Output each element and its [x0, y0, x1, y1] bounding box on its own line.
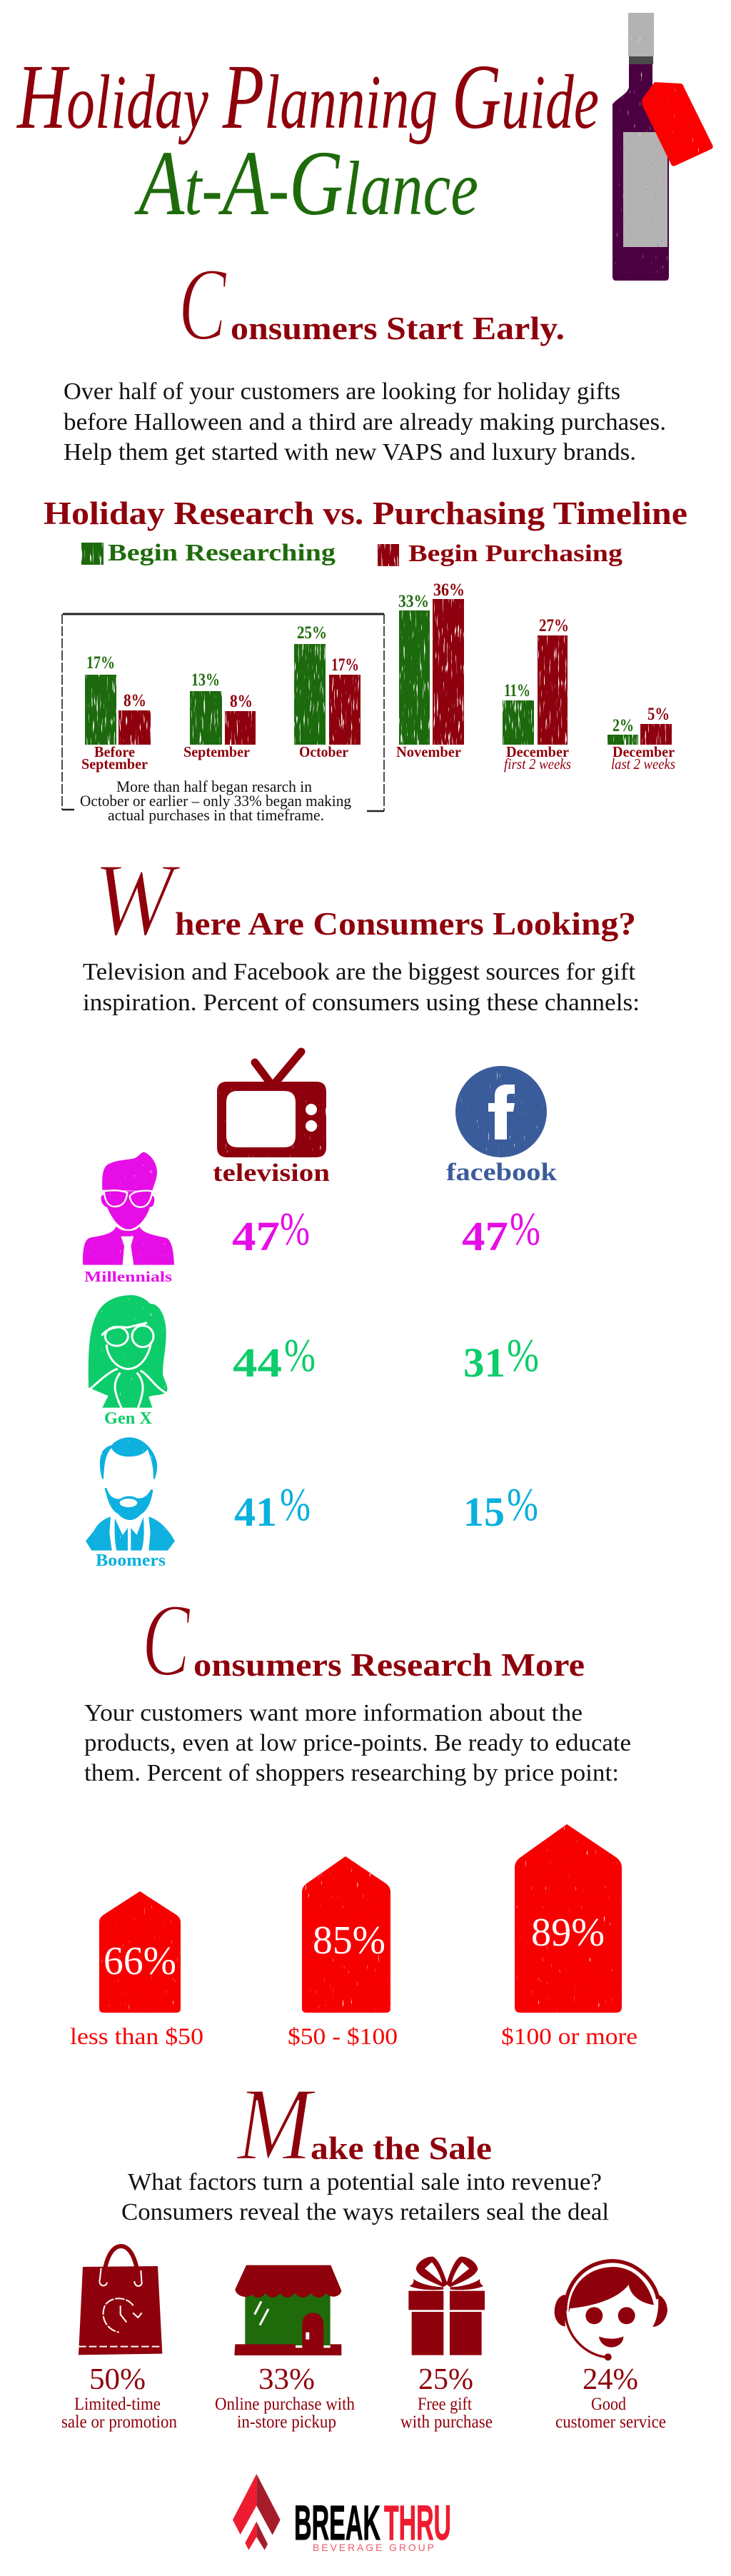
axis labels: first 2 weeks: [504, 755, 571, 773]
axis labels: November: [396, 743, 461, 760]
infographic canvas: THRU: [384, 2495, 451, 2550]
stat: facebook millennials: [462, 1203, 540, 1259]
text block: channels: Television and Facebook are the biggest sources for gift: [83, 959, 636, 985]
heading: consumers research more: [142, 1582, 585, 1698]
text block: sale factors: [121, 2169, 609, 2225]
stat: free gift: Free gift: [418, 2395, 472, 2414]
stat: online purchase: 33%: [258, 2363, 315, 2396]
stat: facebook millennials: 47: [462, 1213, 508, 1259]
stat: customer service: customer service: [555, 2413, 666, 2432]
callout text: [80, 778, 351, 824]
callout text: October or earlier – only 33% began making: [80, 792, 351, 810]
stat: television millennials: %: [280, 1203, 310, 1255]
bar value labels: 8%: [123, 691, 146, 710]
heading: where are consumers looking: here Are Consumers Looking?: [175, 906, 636, 942]
heading: consumers start early: [178, 246, 565, 362]
stat: limited-time sale: 50%: [89, 2363, 146, 2396]
text block: research: [84, 1700, 631, 1786]
text block: research: products, even at low price-points. Be ready to educate: [84, 1730, 631, 1756]
text block: channels: inspiration. Percent of consumers using these channels:: [83, 990, 640, 1016]
axis labels: last 2 weeks: [611, 755, 675, 773]
stat: facebook gen x: %: [507, 1329, 539, 1382]
axis labels: December: [506, 743, 569, 760]
bar value labels: [86, 580, 670, 735]
icon: storefront: [234, 2265, 341, 2355]
stat: television gen x: %: [284, 1329, 316, 1382]
bar value labels: 5%: [647, 705, 670, 724]
legend: Begin Purchasing: [408, 540, 622, 567]
text block: intro: before Halloween and a third are already making purchases.: [64, 409, 666, 436]
text block: research: Your customers want more information about the: [84, 1700, 583, 1726]
bar value labels: 8%: [230, 692, 253, 711]
axis labels: [81, 743, 675, 773]
price tag: $50 to $100: [302, 1856, 390, 2013]
stat: limited-time sale: Limited-time: [74, 2395, 161, 2414]
red purchasing bars: [119, 599, 672, 745]
stat: television millennials: 47: [232, 1213, 280, 1259]
stat: television millennials: [232, 1203, 310, 1259]
heading: consumers research more: C: [142, 1582, 191, 1698]
axis labels: Before: [94, 743, 135, 760]
stat: free gift: [400, 2363, 493, 2432]
icon: millennial figure: [83, 1152, 174, 1265]
stat: television gen x: 44: [233, 1339, 282, 1386]
axis labels: October: [299, 743, 348, 760]
stat: limited-time sale: [61, 2363, 177, 2432]
stat: television gen x: [233, 1329, 316, 1386]
stat: online purchase: Online purchase with: [215, 2395, 355, 2414]
text block: sale factors: Consumers reveal the ways retailers seal the deal: [121, 2199, 609, 2225]
price tag: less than $50: 66%: [104, 1939, 176, 1983]
title: At-A-Glance: [134, 132, 478, 235]
heading: make the sale: [236, 2066, 492, 2182]
price tag: $50 to $100: 85%: [313, 1918, 385, 1963]
text block: intro: Help them get started with new VAPS and luxury brands.: [64, 439, 636, 466]
logo: breakthru beverage group: BREAK: [294, 2495, 380, 2550]
icon: customer service agent: [555, 2261, 667, 2360]
stat: television boomers: [234, 1479, 311, 1535]
callout text: actual purchases in that timeframe.: [108, 806, 324, 824]
bar value labels: 2%: [612, 716, 634, 735]
text block: channels: [83, 959, 640, 1016]
heading: research vs purchasing timeline: Holiday Research vs. Purchasing Timeline: [44, 495, 687, 531]
text block: intro: [64, 378, 666, 466]
stat: limited-time sale: sale or promotion: [61, 2413, 177, 2432]
stat: customer service: [555, 2363, 666, 2432]
heading: where are consumers looking: W: [94, 842, 181, 957]
axis labels: September: [81, 755, 148, 773]
bar value labels: 17%: [86, 653, 115, 673]
icon: television: [217, 1052, 326, 1157]
icon: shopping bag with clock: [79, 2246, 162, 2355]
legend: [81, 540, 622, 567]
logo: breakthru beverage group: BEVERAGE GROUP: [313, 2542, 434, 2553]
label: facebook: facebook: [446, 1158, 558, 1186]
stat: facebook boomers: %: [507, 1479, 538, 1531]
price labels: less than $50: [70, 2024, 203, 2050]
text block: sale factors: What factors turn a potential sale into revenue?: [128, 2169, 602, 2195]
title: [16, 46, 599, 235]
bar value labels: 11%: [504, 681, 530, 700]
heading: make the sale: ake the Sale: [311, 2130, 492, 2166]
heading: consumers start early: C: [178, 246, 227, 362]
stat: facebook millennials: %: [510, 1203, 540, 1255]
stat: customer service: Good: [591, 2395, 626, 2414]
text block: research: them. Percent of shoppers researching by price point:: [84, 1760, 619, 1786]
bar value labels: 13%: [191, 670, 220, 690]
icon: facebook: [455, 1066, 547, 1157]
title: Holiday Planning Guide: [16, 46, 599, 149]
stat: customer service: 24%: [583, 2363, 638, 2396]
stat: television boomers: 41: [234, 1489, 277, 1535]
stat: facebook gen x: 31: [463, 1339, 505, 1386]
logo: breakthru beverage group: [233, 2474, 451, 2553]
stat: online purchase: in-store pickup: [237, 2413, 336, 2432]
heading: make the sale: M: [236, 2066, 316, 2182]
callout text: More than half began resarch in: [116, 778, 312, 795]
bar value labels: 17%: [331, 655, 359, 675]
label: millennials: Millennials: [84, 1268, 172, 1285]
icon: wine bottle with tag: [612, 13, 713, 281]
price labels: $50 - $100: [288, 2024, 398, 2050]
label: gen x: Gen X: [104, 1409, 153, 1428]
bar value labels: 25%: [297, 623, 327, 643]
text block: intro: Over half of your customers are looking for holiday gifts: [64, 378, 620, 405]
bar value labels: 33%: [398, 592, 429, 611]
bar value labels: 36%: [433, 580, 465, 600]
price tag: $100 or more: 89%: [531, 1911, 605, 1955]
label: boomers: Boomers: [96, 1551, 166, 1570]
stat: facebook boomers: 15: [463, 1489, 505, 1535]
price tag: less than $50: [99, 1891, 181, 2013]
stat: facebook boomers: [463, 1479, 538, 1535]
heading: where are consumers looking: [94, 842, 636, 957]
legend: Begin Researching: [108, 540, 336, 566]
heading: consumers start early: onsumers Start Early.: [231, 311, 565, 346]
label: television: television: [213, 1159, 330, 1187]
price labels: $100 or more: [501, 2024, 637, 2050]
price labels: [70, 2024, 637, 2050]
icon: gift box: [408, 2257, 485, 2355]
stat: online purchase: [215, 2363, 355, 2432]
stat: television boomers: %: [280, 1479, 311, 1531]
heading: consumers research more: onsumers Research More: [193, 1647, 585, 1683]
icon: boomer figure: [86, 1437, 175, 1551]
callout: bracket: [62, 614, 384, 811]
axis labels: September: [183, 743, 250, 760]
axis labels: December: [612, 743, 675, 760]
stat: facebook gen x: [463, 1329, 539, 1386]
bar value labels: 27%: [539, 616, 569, 635]
icon: gen x figure: [89, 1295, 167, 1408]
stat: free gift: 25%: [418, 2363, 473, 2396]
price tag: $100 or more: [515, 1824, 622, 2013]
stat: free gift: with purchase: [400, 2413, 493, 2432]
green research bars: [85, 610, 638, 745]
bar chart: research vs purchasing: [81, 580, 675, 773]
